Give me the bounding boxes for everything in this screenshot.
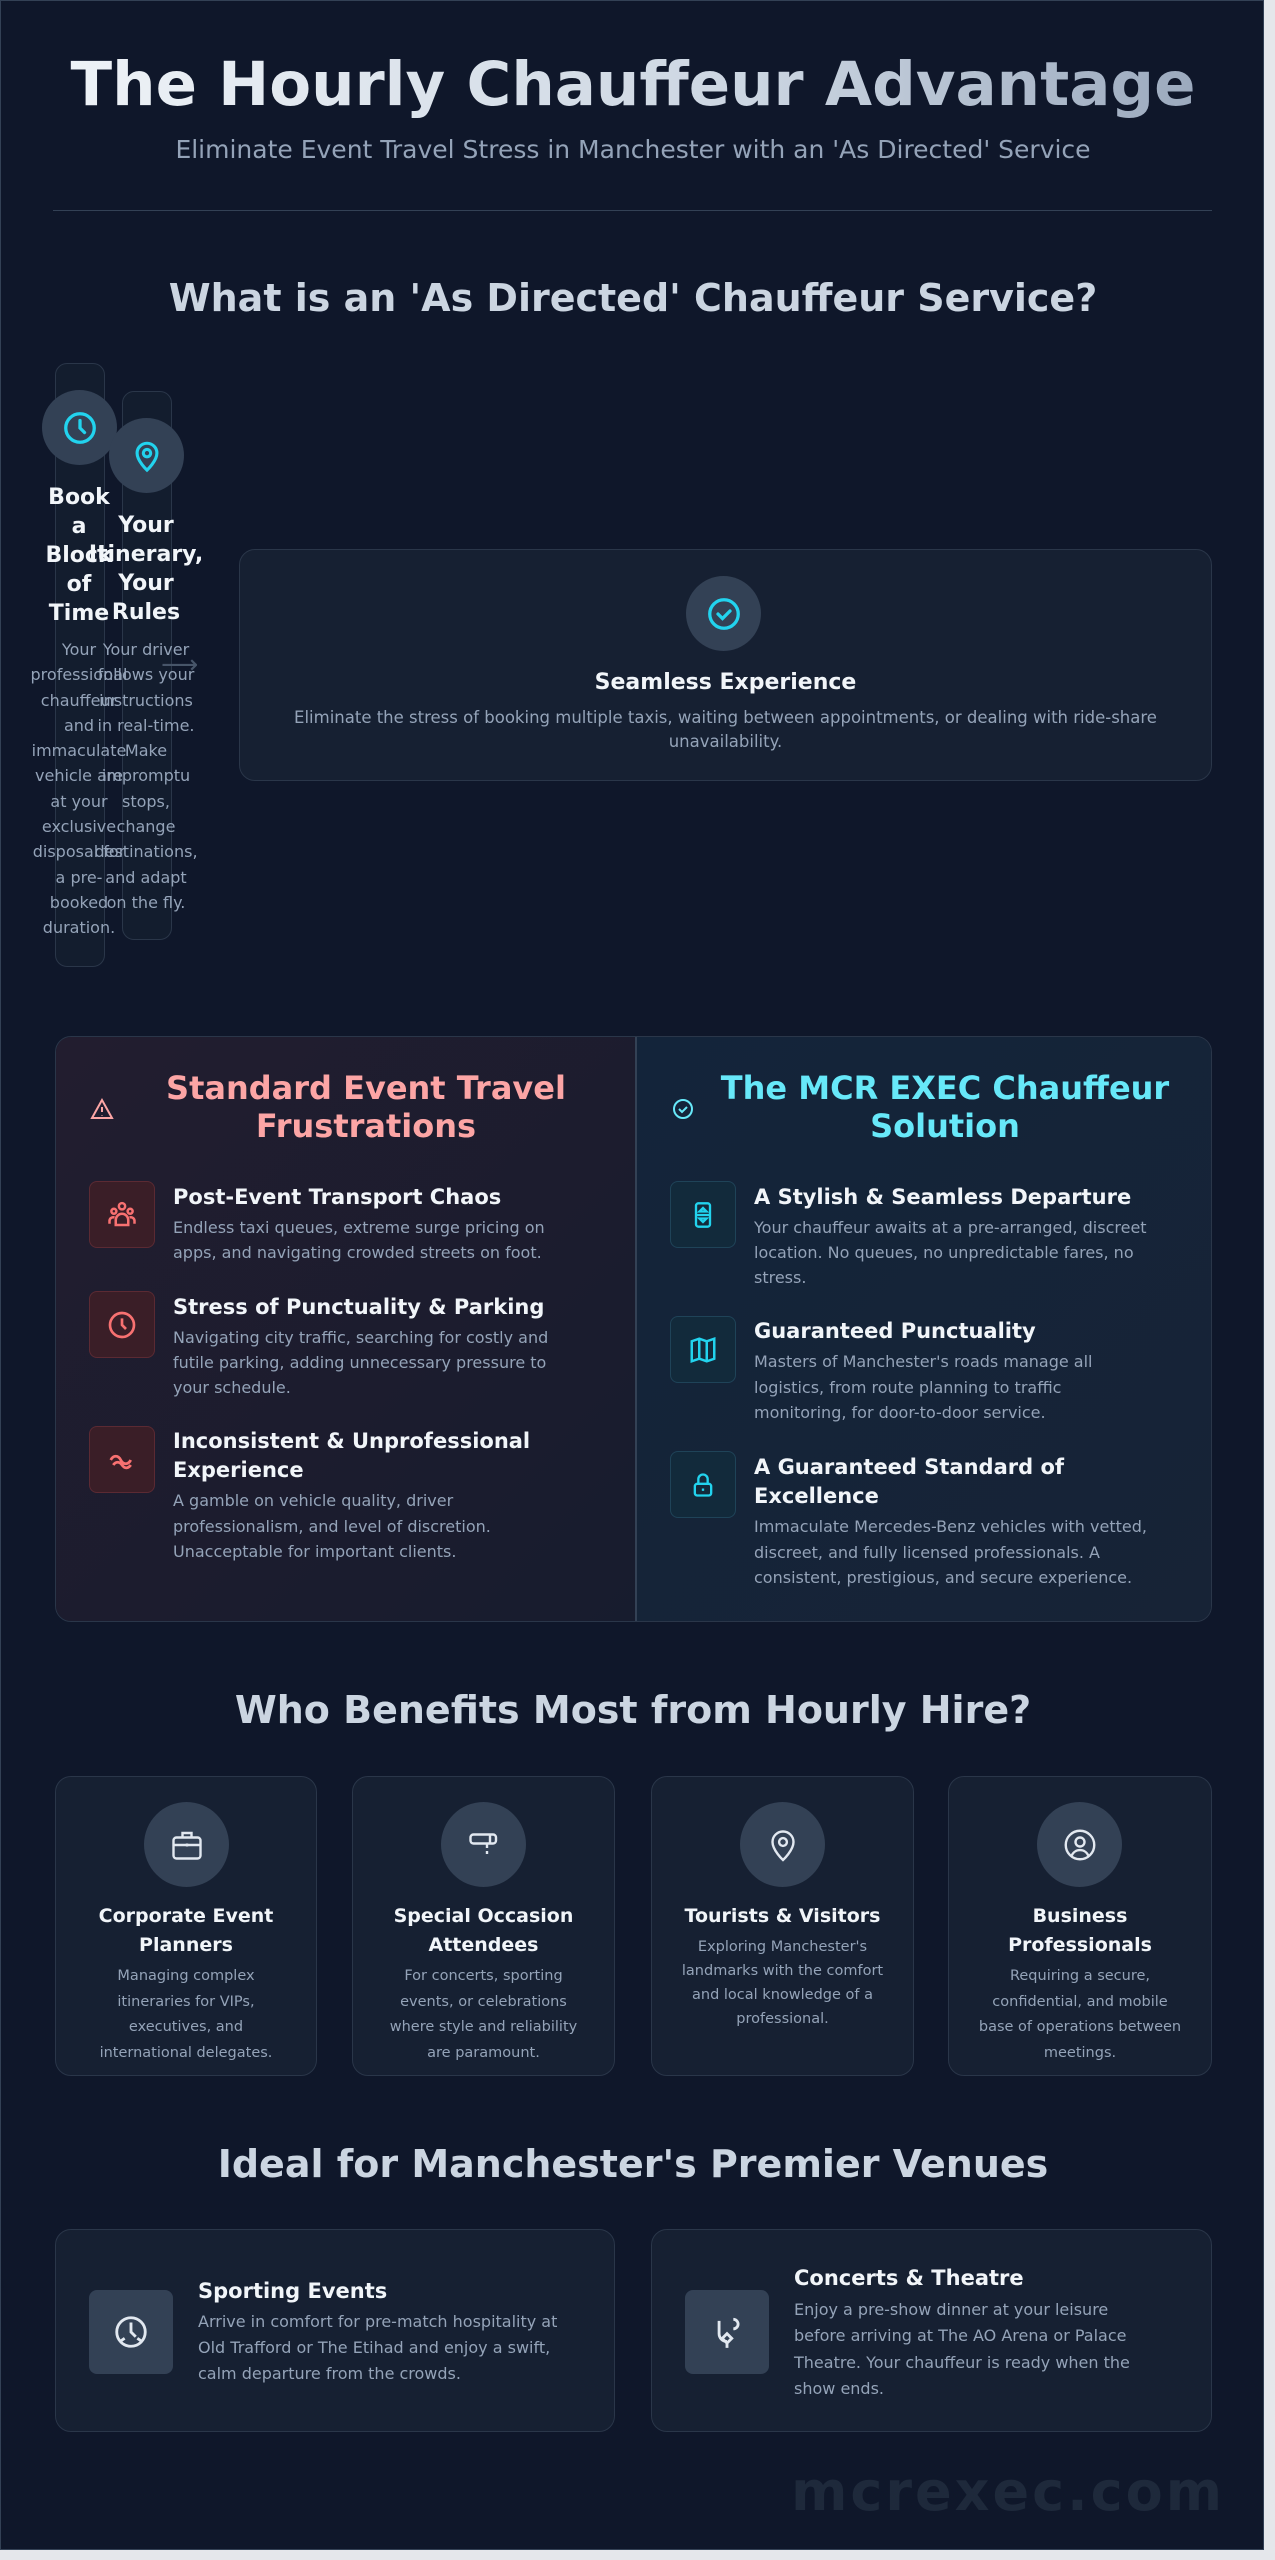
text: itinerary desc: stops, [122,792,170,811]
heading: what is: What is an 'As Directed' Chauffeur Service? [169,276,1097,320]
card: corporate: Corporate Event [99,1905,273,1927]
text: itinerary desc: in real-time. [98,716,194,735]
icon: pin [109,418,184,493]
heading: venues: Ideal for Manchester's Premier Venues [218,2142,1048,2186]
card: business: Requiring a secure, [1010,1968,1150,1984]
text: itinerary desc: destinations, [94,842,198,861]
card: seamless [239,549,1212,781]
card: sporting: Sporting Events [198,2279,387,2303]
text: book a block title: of [67,572,91,597]
card: special occasion: are paramount. [427,2044,540,2060]
card: corporate: executives, and [129,2019,243,2035]
text: book desc: professional [31,665,127,684]
panel: solution: Immaculate Mercedes-Benz vehicles with vetted, [754,1517,1147,1536]
text: itinerary title: Your [118,513,174,538]
panel: solution: Excellence [754,1484,879,1508]
text: book desc: and [64,716,94,735]
card: tourists: Exploring Manchester's [698,1939,867,1955]
panel: solution: Your chauffeur awaits at a pre-arranged, discreet [754,1218,1147,1237]
panel: solution: location. No queues, no unpredictable fares, no [754,1243,1134,1262]
panel: solution: A Stylish & Seamless Departure [754,1185,1131,1209]
card: tourists: professional. [736,2011,829,2027]
text: book desc: vehicle are [35,766,123,785]
heading: who benefits: Who Benefits Most from Hourly Hire? [235,1688,1031,1732]
text: itinerary desc: on the fly. [107,893,185,912]
item 3 [670,1451,1147,1587]
panel: frustrations: Inconsistent & Unprofessional [173,1429,530,1453]
panel: solution: monitoring, for door-to-door service. [754,1403,1046,1422]
text: book desc: exclusive [42,817,116,836]
text: itinerary title: Rules [112,600,180,625]
icon: warning [90,1098,114,1119]
text: Seamless Experience [595,670,856,695]
panel: frustrations: Stress of Punctuality & Parking [173,1295,544,1319]
card: corporate: Planners [139,1934,233,1956]
card: special occasion: where style and reliability [390,2019,577,2035]
text: itinerary title: Itinerary, [89,542,203,567]
card: seamless: unavailability. [669,732,782,751]
text: itinerary title: Your [118,571,174,596]
card: business [948,1776,1212,2076]
text: book desc: immaculate [32,741,126,760]
text: book desc: chauffeur [41,691,117,710]
heading: Solution [870,1107,1020,1145]
panel: frustrations: A gamble on vehicle quality, driver [173,1491,453,1510]
panel: comparison [55,1036,1212,1622]
text: book desc: Your [62,640,96,659]
panel: solution [635,1037,1213,1623]
icon: clock [42,390,117,465]
text: itinerary title [89,513,203,625]
card: corporate: Managing complex [117,1968,255,1984]
card: corporate [55,1776,317,2076]
text: itinerary desc: impromptu [102,766,190,785]
heading [720,1069,1170,1145]
card: tourists: landmarks with the comfort [682,1963,883,1979]
item 1 [670,1181,1147,1287]
card: special occasion: Attendees [429,1934,538,1956]
card: sporting: calm departure from the crowds. [198,2364,461,2383]
text: book a block title: Time [49,601,109,626]
card: tourists: Tourists & Visitors [685,1905,880,1927]
card: concerts: Theatre. Your chauffeur is ready when the [794,2353,1130,2372]
text: book a block title: Block [45,543,113,568]
heading [166,1069,566,1145]
panel: solution: logistics, from route planning to traffic [754,1378,1061,1396]
text: book a block title: Book [48,485,110,510]
item 2 [89,1291,548,1397]
item 3 [89,1426,530,1561]
card: concerts: show ends. [794,2379,884,2398]
text: itinerary desc: Make [125,741,167,760]
card: business: meetings. [1044,2044,1116,2060]
card: corporate: international delegates. [100,2044,272,2060]
panel: frustrations: Experience [173,1458,304,1482]
card: tourists [651,1776,914,2076]
item 1 [89,1181,545,1262]
card: concerts: Enjoy a pre-show dinner at your leisure [794,2300,1108,2319]
card: special occasion: Special Occasion [394,1905,573,1927]
subtitle: Eliminate Event Travel Stress in Manchester with an 'As Directed' Service [175,135,1091,164]
watermark: mcrexec.com [791,2460,1225,2523]
card: special occasion [352,1776,615,2076]
panel: frustrations: futile parking, adding unnecessary pressure to [173,1353,546,1372]
card: special occasion: events, or celebrations [400,1994,567,2010]
card: business: Professionals [1008,1934,1152,1956]
panel: solution: discreet, and fully licensed professionals. A [754,1542,1100,1562]
text: itinerary desc: and adapt [105,868,187,887]
card: concerts [651,2229,1212,2432]
panel: solution: Masters of Manchester's roads manage all [754,1352,1092,1371]
title: The Hourly Chauffeur Advantage [71,49,1195,120]
panel: frustrations: professionalism, and level of discretion. [173,1516,491,1536]
card: concerts: Concerts & Theatre [794,2266,1024,2290]
panel: frustrations: your schedule. [173,1378,291,1397]
panel: frustrations: Navigating city traffic, searching for costly and [173,1328,548,1347]
icon: check [686,576,761,651]
text: itinerary desc: instructions [99,691,193,710]
panel: solution: stress. [754,1268,806,1287]
card: tourists: and local knowledge of a [692,1987,873,2003]
text: book a block title: a [72,514,86,539]
text: itinerary desc: Your driver [103,640,189,659]
card: book a block [55,363,105,967]
icon: check [673,1099,693,1119]
text: book a block title [45,485,113,626]
text: itinerary desc: change [117,817,175,836]
item 2 [670,1316,1092,1422]
card: concerts: before arriving at The AO Arena or Palace [794,2326,1126,2345]
arrow: ⟶ [161,650,198,680]
card: business: confidential, and mobile [992,1994,1168,2010]
panel: solution: Guaranteed Punctuality [754,1319,1036,1343]
panel: frustrations: apps, and navigating crowded streets on foot. [173,1243,542,1262]
card: sporting [55,2229,615,2432]
panel: solution: A Guaranteed Standard of [754,1455,1064,1479]
card: business: base of operations between [979,2019,1181,2035]
text: book desc: duration. [43,918,115,937]
text: book desc: disposal for [33,842,125,861]
card: itinerary [122,391,172,940]
heading: Standard Event Travel [166,1069,566,1107]
card: business: Business [1033,1905,1127,1927]
heading: The MCR EXEC Chauffeur [721,1069,1169,1107]
card: sporting: Old Trafford or The Etihad and enjoy a swift, [198,2338,550,2357]
text: itinerary desc: follows your [98,665,194,684]
card: special occasion: For concerts, sporting [404,1968,563,1984]
panel: frustrations: Unacceptable for important clients. [173,1542,456,1561]
heading: Frustrations [256,1107,476,1145]
text: book desc: booked [50,893,108,912]
panel: frustrations: Endless taxi queues, extreme surge pricing on [173,1218,545,1237]
text: book desc: at your [50,792,108,811]
panel: solution: consistent, prestigious, and secure experience. [754,1568,1132,1587]
text: book desc: a pre- [56,868,102,887]
card: sporting: Arrive in comfort for pre-match hospitality at [198,2312,557,2331]
card: seamless: Eliminate the stress of booking multiple taxis, waiting between appointments, or dealing with ride-share [294,708,1157,727]
text: book desc [31,640,127,937]
panel: frustrations: Post-Event Transport Chaos [173,1185,501,1209]
panel: frustrations [56,1037,635,1623]
text: itinerary desc [94,640,198,912]
card: corporate: itineraries for VIPs, [117,1994,255,2010]
